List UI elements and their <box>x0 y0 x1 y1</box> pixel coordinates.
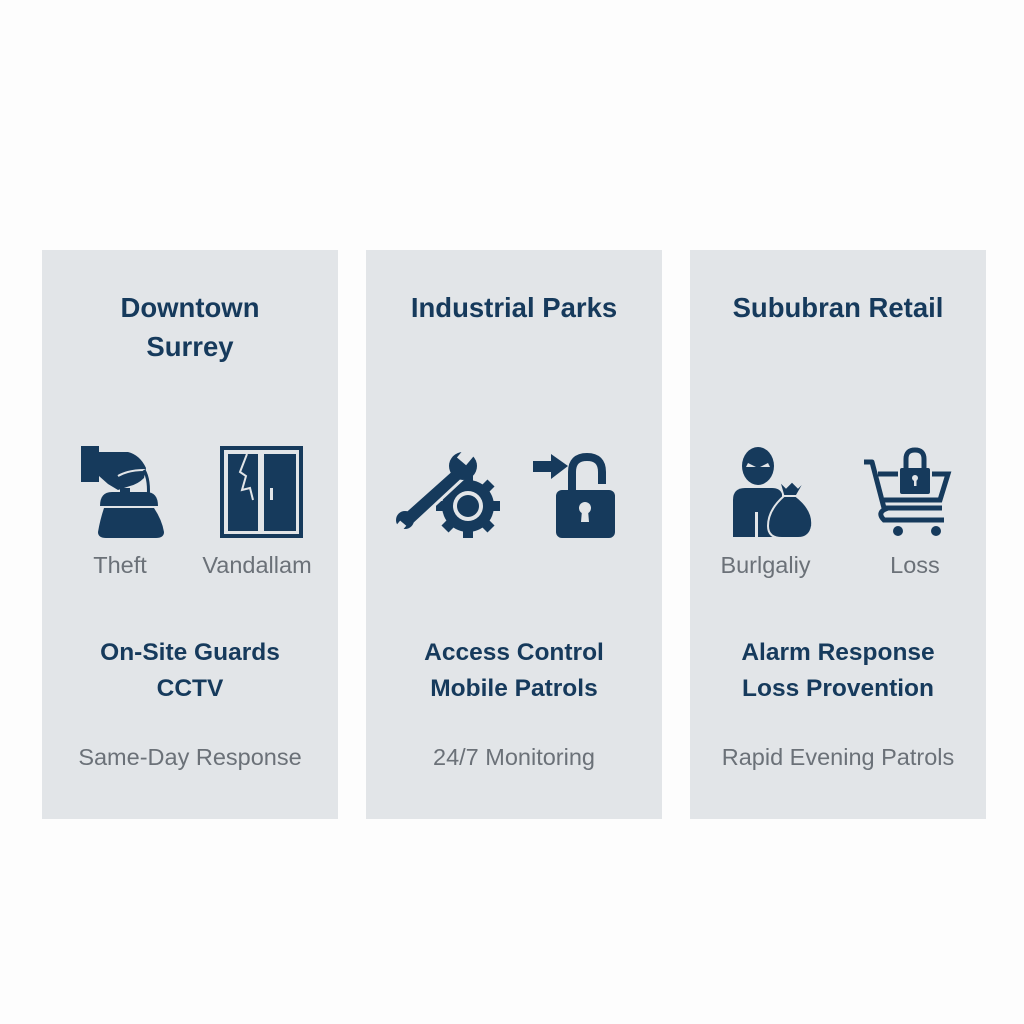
label: Theft: Theft <box>93 552 147 578</box>
panel: Suburban Retail <box>690 250 986 819</box>
services: Access Control <box>424 639 604 666</box>
heading: Industrial Parks: Industrial Parks <box>411 292 617 323</box>
tagline: Rapid Evening Patrols <box>722 744 954 770</box>
tagline: Same-Day Response <box>78 744 302 770</box>
panel: Industrial Parks <box>366 250 662 819</box>
label: Burlgaliy: Burlgaliy <box>720 552 811 578</box>
label: Vandallam: Vandallam <box>202 552 312 578</box>
icon: hand with purse <box>81 446 164 538</box>
services: Loss Provention <box>742 675 934 702</box>
panel: Downtown Surrey <box>42 250 338 819</box>
heading: Downtown Surrey: Downtown <box>120 292 260 323</box>
label: Loss: Loss <box>890 552 940 578</box>
icon: broken window <box>222 448 301 536</box>
icon: wrench and gear <box>394 447 500 538</box>
services <box>424 639 604 702</box>
services: On-Site Guards <box>100 639 280 666</box>
tagline: 24/7 Monitoring <box>433 744 595 770</box>
heading: Downtown Surrey: Surrey <box>146 331 234 362</box>
services <box>741 639 935 702</box>
services: Mobile Patrols <box>430 675 598 702</box>
icon: padlock with arrow <box>533 454 615 538</box>
heading: Downtown Surrey <box>120 292 260 362</box>
icon: shopping cart with lock <box>864 450 948 536</box>
heading: Sububran Retail: Sububran Retail <box>733 292 943 323</box>
icon: burglar with money bag <box>733 447 812 538</box>
services <box>100 639 280 702</box>
services: Alarm Response <box>741 639 935 666</box>
services: CCTV <box>157 675 223 702</box>
